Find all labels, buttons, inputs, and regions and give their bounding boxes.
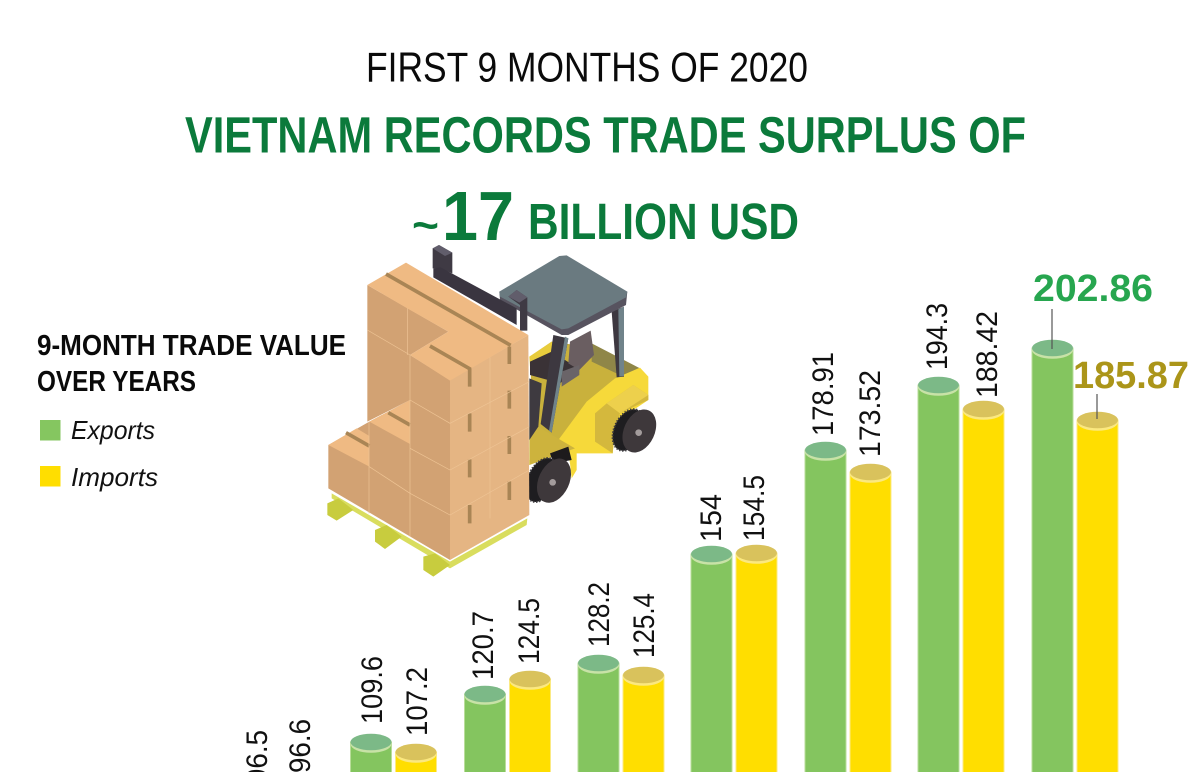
bar pair: 194.3 and 188.42	[918, 303, 1004, 772]
bar pair: 194.3 and 188.42: 194.3	[921, 303, 954, 370]
canopy roof	[499, 255, 627, 335]
bar pair: 154 and 154.5: 154	[695, 494, 728, 542]
bar pair: 109.6 and 107.2: 109.6	[356, 656, 389, 724]
bar pair: 109.6 and 107.2: 107.2	[401, 667, 434, 736]
bar pair: 202.86 and 185.87	[1032, 268, 1189, 772]
legend heading: OVER YEARS	[37, 366, 196, 398]
bar pair: 154 and 154.5: 154.5	[738, 475, 771, 541]
bar pair: 96.5 and 96.6 labels	[241, 719, 317, 772]
icon: rear wheel	[606, 404, 663, 458]
bar pair: 202.86 and 185.87: 202.86	[1033, 268, 1153, 310]
illustration: forklift carrying boxes	[327, 245, 663, 577]
legend	[37, 330, 346, 492]
bar pair: 109.6 and 107.2	[350, 656, 436, 772]
stacked boxes	[328, 263, 529, 560]
legend item: imports: Imports	[71, 462, 158, 492]
bar chart: exports and imports by year	[241, 268, 1189, 772]
icon: seat	[529, 331, 594, 440]
bar pair: 154 and 154.5	[691, 475, 777, 772]
bar pair: 128.2 and 125.4: 125.4	[628, 593, 661, 658]
legend heading	[37, 330, 346, 398]
legend item: exports: Exports	[71, 415, 155, 445]
bar pair: 128.2 and 125.4: 128.2	[583, 582, 616, 647]
bar pair: 120.7 and 124.5	[464, 598, 550, 772]
bar pair: 120.7 and 124.5: 124.5	[513, 598, 546, 664]
bar pair: 178.91 and 173.52	[805, 352, 891, 772]
pallet	[327, 493, 527, 577]
forklift mast and forks	[433, 245, 527, 331]
bar pair: 202.86 and 185.87: 185.87	[1073, 355, 1189, 397]
heading: 17 billion USD: 17	[442, 177, 514, 255]
legend heading: 9-MONTH TRADE VALUE	[37, 330, 346, 362]
heading: 17 billion USD	[412, 177, 799, 255]
canopy legs	[541, 307, 624, 433]
bar pair: 194.3 and 188.42: 188.42	[971, 311, 1004, 398]
bar pair: 178.91 and 173.52: 178.91	[807, 352, 840, 436]
bar pair: 96.5 and 96.6 labels: 96.6	[284, 719, 317, 772]
title: first 9 months: FIRST 9 MONTHS OF 2020	[366, 44, 808, 90]
bar pair: 128.2 and 125.4	[578, 582, 664, 772]
heading: 17 billion USD: ~	[412, 201, 439, 250]
heading: 17 billion USD: BILLION USD	[528, 193, 799, 250]
forklift body	[499, 255, 663, 508]
bar pair: 120.7 and 124.5: 120.7	[467, 611, 500, 680]
icon: front wheel	[519, 453, 578, 508]
heading: trade surplus: VIETNAM RECORDS TRADE SURPLUS OF	[185, 107, 1026, 164]
bar pair: 178.91 and 173.52: 173.52	[854, 370, 887, 457]
